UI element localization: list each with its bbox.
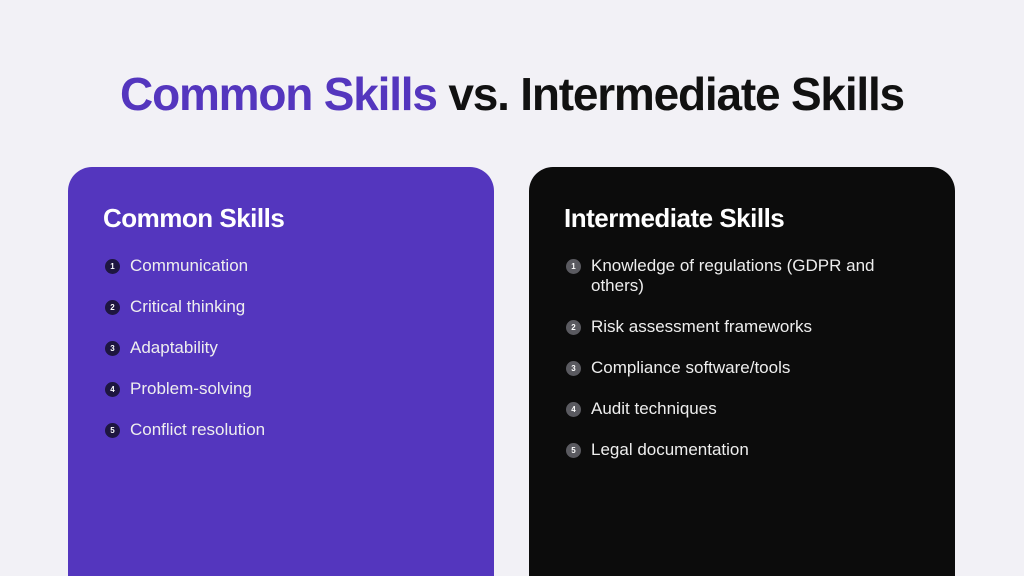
item 2: Risk assessment frameworks xyxy=(591,317,812,336)
item 1: Communication xyxy=(130,256,248,275)
item 3: Adaptability xyxy=(130,338,218,357)
item 4: 4 xyxy=(110,385,115,394)
item 5: 5 xyxy=(571,446,576,455)
item 1: 1 xyxy=(110,262,115,271)
item 5: 5 xyxy=(110,426,115,435)
item 3: 3 xyxy=(571,364,576,373)
item 3: 3 xyxy=(110,344,115,353)
item 3: Compliance software/tools xyxy=(591,358,790,377)
item 4: Problem-solving xyxy=(130,379,252,398)
item 1: Knowledge of regulations (GDPR and others) xyxy=(591,256,874,295)
item 2: Critical thinking xyxy=(130,297,245,316)
item 2: 2 xyxy=(571,323,576,332)
item 5: Legal documentation xyxy=(591,440,749,459)
item 2: 2 xyxy=(110,303,115,312)
item 4: Audit techniques xyxy=(591,399,717,418)
item 1: 1 xyxy=(571,262,576,271)
item 4: 4 xyxy=(571,405,576,414)
heading: common skills: Common Skills xyxy=(103,203,284,233)
panel: intermediate skills xyxy=(529,167,955,576)
panel: common skills xyxy=(68,167,494,576)
heading: intermediate skills: Intermediate Skills xyxy=(564,203,784,233)
title: Common Skills vs. Intermediate Skills xyxy=(120,68,904,120)
item 5: Conflict resolution xyxy=(130,420,265,439)
